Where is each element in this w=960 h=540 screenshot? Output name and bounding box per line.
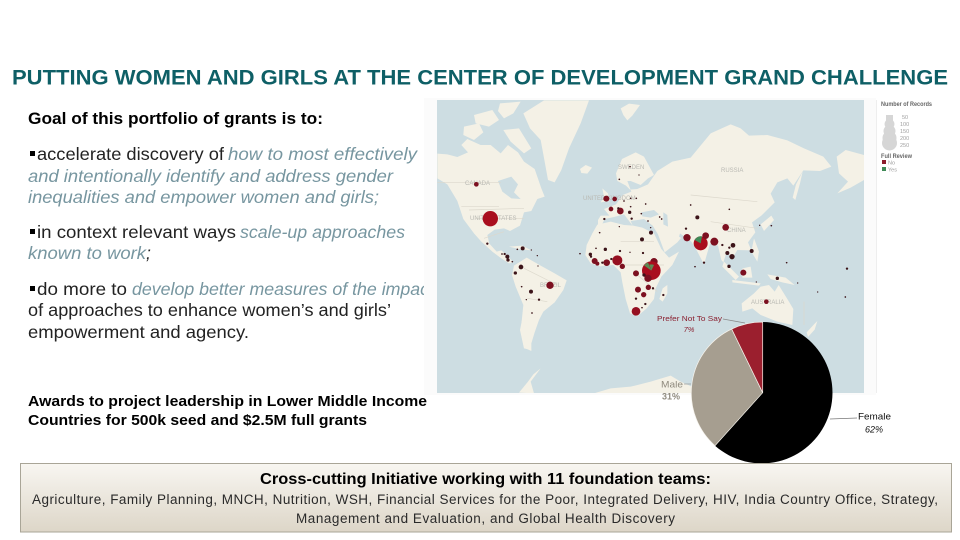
map inland water [498,177,691,242]
bullet: better measures: develop better measures of the impact [132,279,435,299]
text block: portfolio goals [28,110,435,342]
map country labels [465,165,784,306]
pie slice: male 31% [691,329,763,446]
pie chart: respondents by gender [657,314,891,463]
label: female: 62% [865,424,883,434]
panel text: foundation teams: Management and Evaluation, and Global Health Discovery [296,511,675,526]
map country labels: CANADA [465,181,490,187]
bullet: scale-up: in context relevant ways [37,222,236,242]
legend: full review [881,154,912,174]
heading: goal: Goal of this portfolio of grants is to: [28,110,323,128]
legend: number of records: Number of Records [881,102,933,108]
text block: awards: Awards to project leadership in Lower Middle Income [28,394,427,410]
bullet: better measures: of approaches to enhance women’s and girls’ [28,300,391,320]
panel: cross-cutting initiative [20,464,952,532]
legend: number of records: 250 [900,143,909,149]
map country labels: RUSSIA [721,168,743,174]
label: prefer not to say: Prefer Not To Say [657,314,722,323]
panel heading: Cross-cutting Initiative working with 11 foundation teams: [260,471,711,488]
legend: number of records: 50 [902,115,908,121]
map borders [437,182,804,325]
label: female [830,412,891,434]
label: prefer not to say [657,314,745,334]
map country labels: BRAZIL [540,283,562,289]
label: male [661,380,691,402]
pie slice: female 62% [715,322,832,463]
label: prefer not to say: 7% [684,325,695,334]
bullet: accelerate discovery [28,144,418,207]
label: female: Female [858,412,891,422]
panel: world map of grants [424,98,877,395]
legend: full review: Yes [888,168,897,174]
pie slice: prefer not to say 7% [732,322,763,393]
text block: awards [28,394,427,429]
bullet: better measures: empowerment and agency. [28,322,249,342]
label: male: 31% [662,392,680,402]
map grant markers [474,166,691,316]
map country labels: CHINA [727,228,746,234]
bullet: scale-up: scale-up approaches [240,222,405,242]
bullet: scale-up [28,222,405,263]
legend: number of records: 150 [900,129,909,135]
bullet: scale-up: known to work [28,243,147,263]
bullet: accelerate discovery: and intentionally identify and address gender [28,166,394,186]
map country labels: AUSTRALIA [751,300,784,306]
bullet: accelerate discovery: accelerate discovery of [37,144,224,164]
panel text: foundation teams [32,492,938,526]
bullet: accelerate discovery: how to most effectively [228,144,418,164]
title: PUTTING WOMEN AND GIRLS AT THE CENTER OF DEVELOPMENT GRAND CHALLENGE [12,66,948,90]
panel text: foundation teams: Agriculture, Family Planning, MNCH, Nutrition, WSH, Financial Services for the Poor, Integrated Delivery, HIV, India Country Office, Strategy, [32,492,938,507]
bullet: better measures: do more to [37,279,127,299]
bullet: accelerate discovery: inequalities and empower women and girls; [28,187,379,207]
legend: number of records [881,102,933,150]
label: male: Male [661,380,683,390]
map country labels: UNITED KINGDOM [583,196,636,202]
map country labels: SWEDEN [618,165,644,171]
map land: western hemisphere, Africa, Eurasia [437,100,864,393]
legend: full review: Full Review [881,154,912,160]
legend: number of records: 200 [900,136,909,142]
bullet: scale-up: ; [146,243,151,263]
bullet: better measures [28,279,435,342]
map legend [881,102,933,174]
map country labels: UNITED STATES [470,216,516,222]
legend: full review: No [888,160,895,166]
legend: number of records: 100 [900,122,909,128]
text block: awards: Countries for 500k seed and $2.5M full grants [28,413,367,429]
